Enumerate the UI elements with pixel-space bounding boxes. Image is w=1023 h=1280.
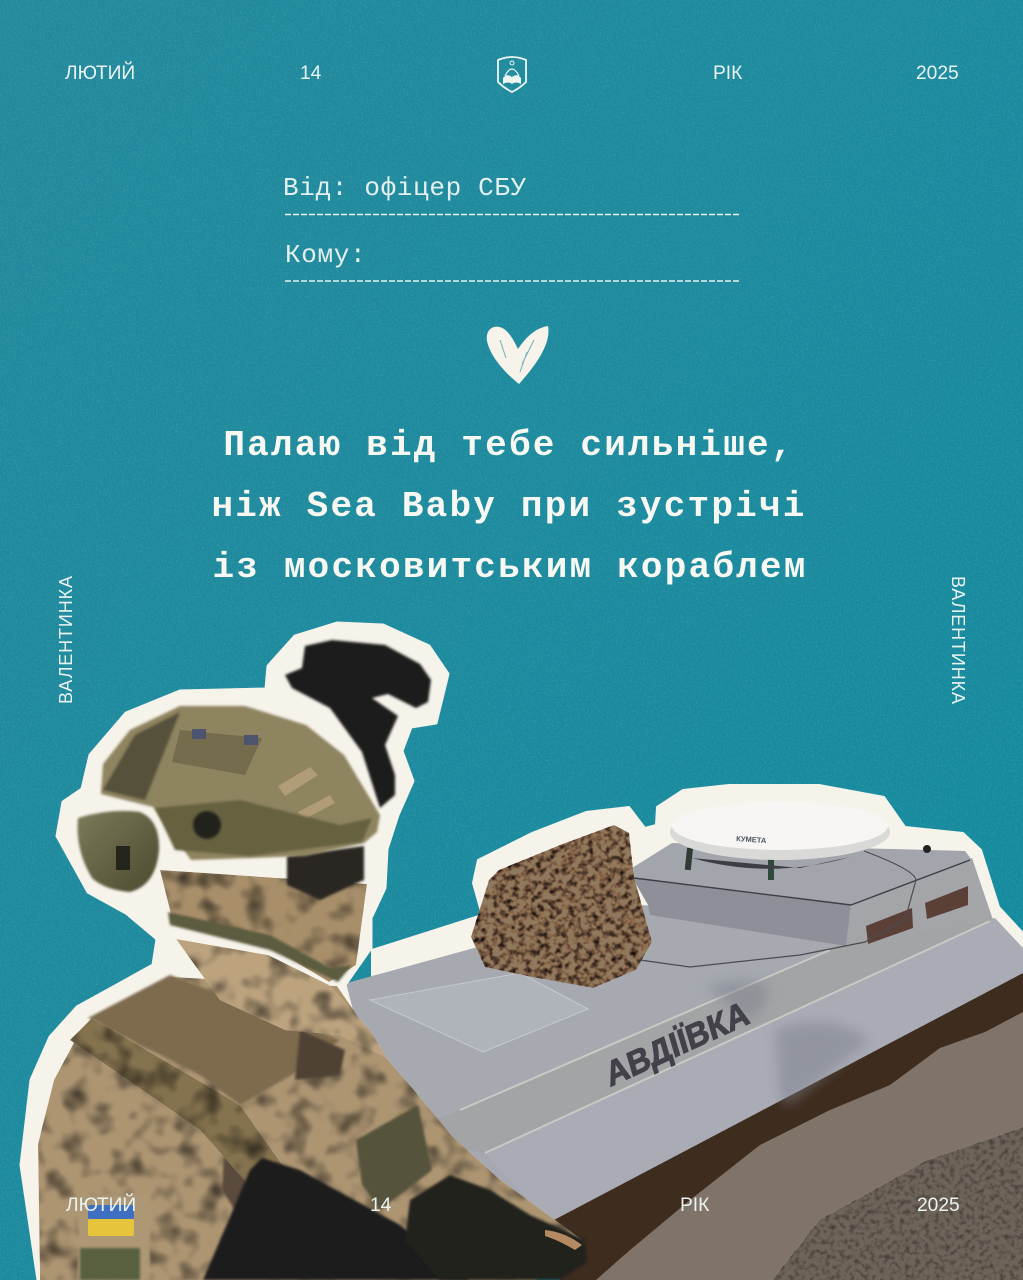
bottom date row: РІК [680, 1195, 710, 1216]
lower hull band [485, 918, 1023, 1222]
helmet rail [155, 800, 372, 856]
rifle [203, 1158, 470, 1280]
top date row: РІК [713, 63, 743, 84]
heading message: Палаю від тебе сильніше, [223, 425, 795, 466]
satellite dish [670, 802, 890, 880]
top date row [65, 62, 959, 84]
boat name: АВДІЇВКА [601, 994, 753, 1095]
helmet straps [278, 767, 335, 820]
goggles shadow [287, 846, 364, 900]
icon: Ukrainian flag patch [88, 1205, 134, 1236]
camouflage net [471, 825, 652, 988]
heading message: із московитським кораблем [212, 547, 808, 588]
hull lines [460, 921, 990, 1153]
bottom date row: ЛЮТИЙ [66, 1194, 136, 1216]
bottom date row: 14 [370, 1195, 392, 1216]
bottom date row [66, 1194, 960, 1216]
olive patch [80, 1248, 140, 1280]
cabin side [846, 858, 993, 946]
sleeve patch [78, 1195, 150, 1280]
top date row: ЛЮТИЙ [65, 62, 135, 84]
neck scarf [176, 939, 387, 1058]
helmet [101, 706, 380, 860]
shoulder strap [88, 975, 340, 1105]
deck hatch [370, 973, 588, 1052]
side band [400, 918, 995, 1153]
balaclava [160, 870, 367, 982]
chin strap [168, 912, 352, 982]
torso camo uniform [38, 977, 585, 1280]
ear cup [78, 811, 159, 892]
heading message [211, 425, 808, 588]
photo cutout: soldier [21, 623, 587, 1280]
vents [866, 908, 913, 944]
gloved hands [405, 1175, 587, 1280]
hull shadows [705, 981, 870, 1105]
vertical label right: ВАЛЕНТИНКА [948, 576, 968, 704]
hull [340, 905, 1023, 1222]
satellite dish: КУМЕТА [736, 834, 767, 845]
address block: from and to: Від: офіцер СБУ [283, 173, 527, 203]
cabin top [632, 843, 972, 905]
heading message: ніж Sea Baby при зустрічі [211, 486, 807, 527]
night vision device [285, 640, 431, 808]
cable [640, 851, 916, 967]
vest plate [356, 1105, 432, 1210]
top date row: 14 [300, 63, 322, 84]
icon: hand-drawn heart [487, 326, 548, 384]
top date row: 2025 [916, 63, 959, 84]
photo cutout: drone boat [340, 785, 1023, 1222]
bottom date row: 2025 [917, 1195, 960, 1216]
vertical label left: ВАЛЕНТИНКА [56, 576, 76, 704]
address block: from and to [283, 173, 739, 281]
address block: from and to: Кому: [285, 240, 366, 270]
ground and water under the boat [540, 970, 1023, 1280]
soldier sticker outline [21, 623, 448, 1280]
helmet patch [172, 730, 262, 775]
boat sticker outline [372, 785, 1023, 1100]
dark gap under arm [222, 1135, 262, 1210]
cabin front [632, 877, 851, 946]
icon: shield emblem [498, 57, 526, 92]
deck [340, 905, 845, 1136]
